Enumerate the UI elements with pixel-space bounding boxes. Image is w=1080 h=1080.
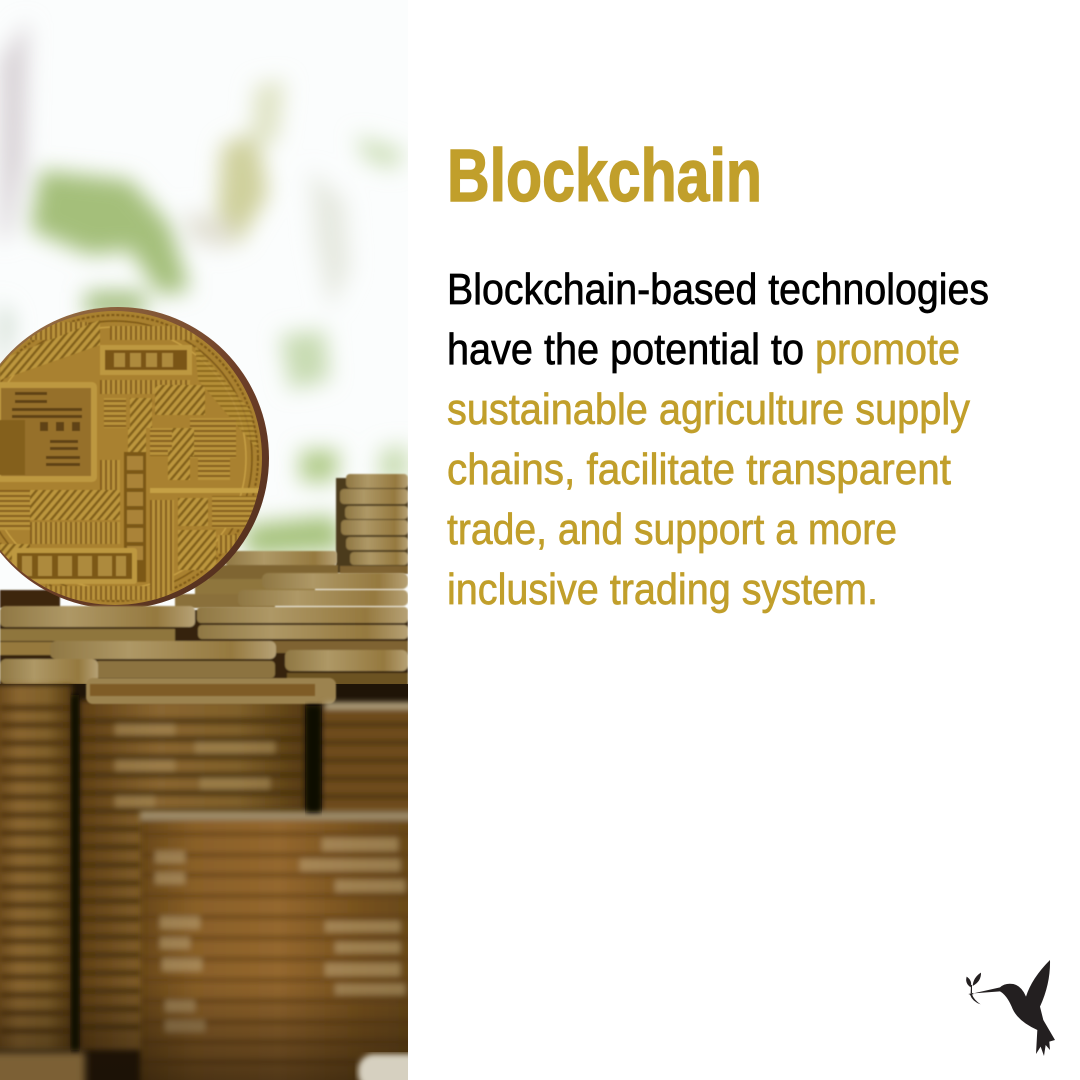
- highlighted sentence: [447, 325, 970, 614]
- highlighted sentence: sustainable agriculture supply: [447, 385, 970, 434]
- sky background: [0, 0, 408, 1080]
- highlighted sentence: trade, and support a more: [447, 505, 897, 554]
- highlighted sentence: inclusive trading system.: [447, 565, 878, 614]
- highlighted sentence: chains, facilitate transparent: [447, 445, 951, 494]
- coin circuit engraving: [0, 315, 260, 601]
- icon: hummingbird logo with sprig: [966, 960, 1055, 1056]
- large upright gold coin: [0, 307, 269, 609]
- middle stack: [80, 700, 305, 1050]
- blurred foliage: [0, 20, 408, 556]
- middle stack top rim: [86, 678, 336, 704]
- blurred foreground coin stacks: [0, 678, 428, 1080]
- body paragraph: have the potential to: [447, 325, 804, 374]
- front coin piles below the large coin: [0, 572, 408, 684]
- dark gaps: [0, 684, 408, 1080]
- title: Blockchain: [447, 134, 762, 217]
- highlighted sentence: promote: [815, 325, 960, 374]
- body paragraph: [447, 265, 989, 614]
- front large stack: [140, 811, 420, 1080]
- left stack: [0, 685, 72, 1050]
- photo: gold coins against blurred foliage: [0, 0, 428, 1080]
- bottom blurred coins: [0, 1052, 85, 1080]
- back coin stacks: [0, 551, 338, 608]
- body paragraph: Blockchain-based technologies: [447, 265, 989, 314]
- depth shading at the bottom: [0, 991, 408, 1080]
- right stack: [322, 702, 418, 814]
- small right coin stack: [336, 474, 408, 574]
